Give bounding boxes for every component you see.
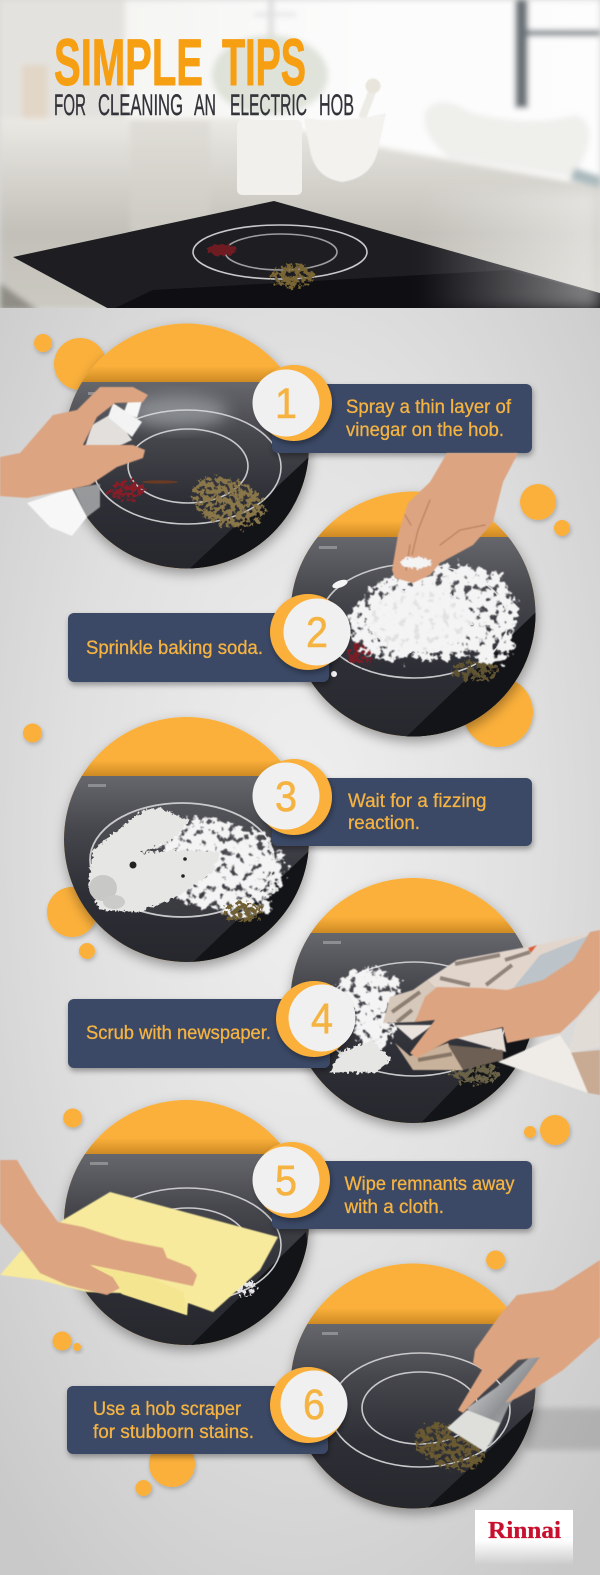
hob disc [60, 1100, 320, 1349]
number badge [252, 759, 332, 835]
burnt stain [408, 1414, 490, 1480]
number badge: 2 [306, 609, 328, 657]
hob disc [285, 878, 545, 1128]
hand wiping [0, 1160, 197, 1295]
hand scrubbing [410, 930, 600, 1058]
title line 1: SIMPLE [54, 25, 203, 99]
shadow on background [525, 1408, 600, 1450]
instruction text [348, 790, 486, 834]
title line 2: CLEANING [98, 89, 183, 122]
number badge [270, 1367, 348, 1443]
yellow cloth [0, 1192, 278, 1315]
number badge: 5 [275, 1157, 297, 1205]
step 1 [0, 324, 532, 572]
number badge [276, 981, 356, 1057]
instruction bar [272, 384, 532, 453]
burnt residue [223, 902, 263, 922]
black hob surface [13, 190, 600, 310]
step 3 [23, 717, 532, 966]
vinegar and soda foam [88, 808, 284, 922]
instruction text: Use a hob scraper [93, 1398, 241, 1420]
decorative bubbles [23, 724, 97, 959]
number badge: 4 [311, 995, 333, 1043]
instruction text: Wipe remnants away [344, 1173, 515, 1195]
crumpled newspaper [383, 931, 600, 1095]
decorative bubbles [63, 1108, 570, 1145]
cloth fold over hand [90, 1265, 187, 1315]
title line 2 [54, 89, 354, 122]
instruction text: for stubborn stains. [93, 1421, 254, 1443]
instruction bar [68, 613, 329, 682]
instruction text: Spray a thin layer of [346, 396, 512, 418]
hob scraper [447, 1357, 542, 1452]
number badge: 6 [303, 1381, 325, 1429]
white pot [237, 120, 302, 195]
instruction text: vinegar on the hob. [346, 419, 504, 441]
title line 2: FOR [54, 89, 86, 122]
number badge: 1 [275, 380, 297, 428]
instruction text: reaction. [348, 812, 420, 834]
hob disc [60, 717, 320, 966]
hob disc [60, 324, 320, 572]
instruction text: Scrub with newspaper. [86, 1022, 271, 1044]
step 2 [68, 453, 570, 747]
hand sprinkling soda [392, 453, 518, 583]
instruction bar [68, 999, 330, 1068]
decorative bubbles [52, 1250, 505, 1496]
instruction text [344, 1173, 515, 1218]
instruction bar [272, 1161, 532, 1229]
number badge: 3 [275, 773, 297, 821]
title line 2: AN [194, 89, 216, 122]
hand holding scraper [458, 1260, 600, 1413]
step 4 [68, 878, 600, 1128]
decorative bubbles [34, 334, 106, 390]
blurred kitchen backdrop [0, 0, 600, 310]
step 6 [52, 1250, 600, 1514]
title [54, 25, 354, 122]
mortar and pestle [304, 78, 386, 182]
step 5 [0, 1100, 570, 1349]
number badge [252, 365, 332, 441]
instruction text: Sprinkle baking soda. [86, 637, 263, 659]
instruction text [346, 396, 512, 441]
Rinnai logo [475, 1510, 573, 1565]
title line 2: HOB [319, 89, 354, 122]
header photo: kitchen counter with hob [0, 0, 600, 310]
foam [330, 968, 499, 1085]
instruction text: with a cloth. [344, 1196, 444, 1218]
instruction text [93, 1398, 254, 1443]
title line 1: TIPS [222, 25, 306, 99]
Rinnai logo: Rinnai [488, 1518, 561, 1544]
hob disc [285, 492, 545, 742]
hob disc [285, 1264, 545, 1514]
decorative bubbles [463, 484, 570, 747]
instruction bar [67, 1386, 328, 1454]
instruction bar [272, 778, 532, 846]
instruction text: Wait for a fizzing [348, 790, 486, 812]
baking soda powder [331, 565, 518, 677]
number badge [252, 1142, 330, 1218]
hand holding bottle [0, 387, 148, 498]
smooth foam sheet [88, 808, 220, 912]
title line 2: ELECTRIC [230, 89, 307, 122]
spray bottle [27, 401, 142, 536]
number badge [270, 594, 350, 670]
